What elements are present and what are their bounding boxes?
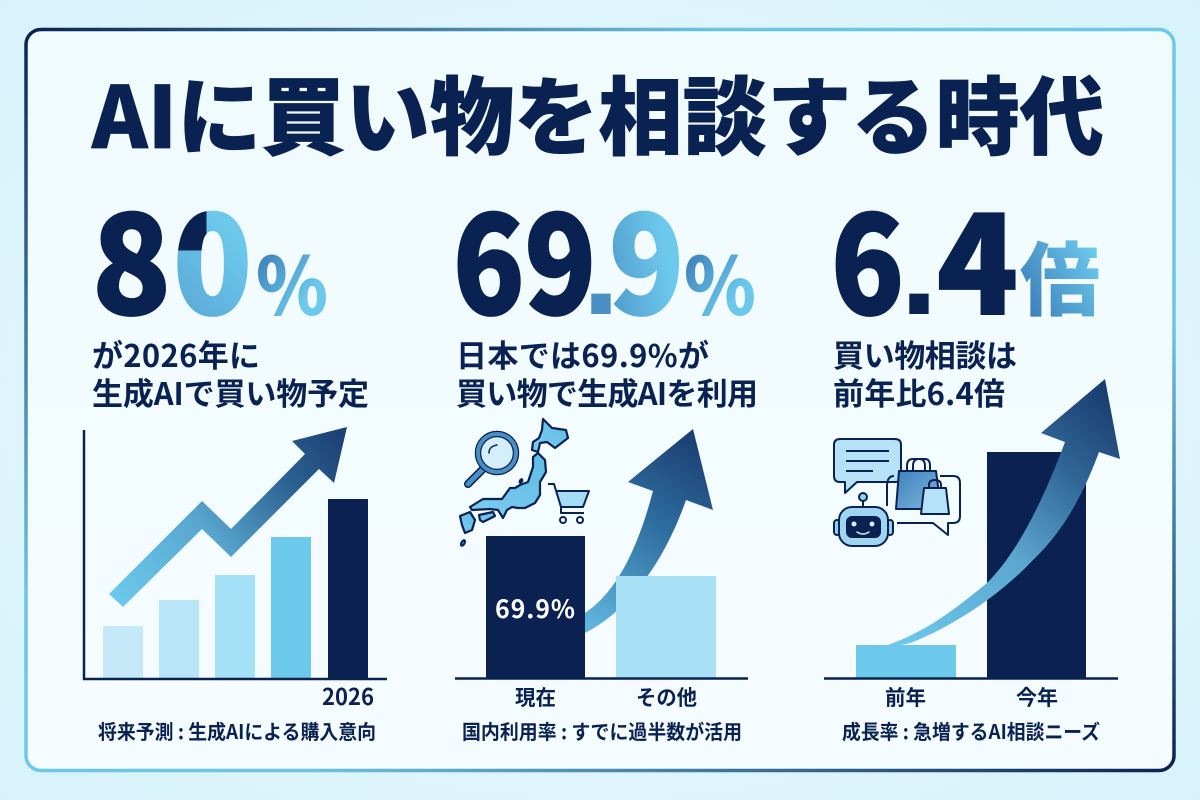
- axis label: previous year: 前年: [885, 682, 926, 712]
- panel: 69.9% Japan usage: [453, 157, 758, 745]
- big stat 6.4倍: [831, 157, 1100, 353]
- arrow: steep curved rise: [888, 379, 1120, 645]
- icon: chat bubble: [834, 439, 901, 493]
- caption: growth rate: 成長率 : 急増するAI相談ニーズ: [842, 716, 1100, 745]
- heading: 80% description: [92, 331, 369, 414]
- arrow: rising zigzag trend: [109, 427, 347, 607]
- axis label: this year: 今年: [1016, 682, 1058, 712]
- icon: shopping bags: [896, 459, 949, 514]
- icon: shopping cart: [548, 484, 589, 523]
- heading: Japan usage description: 日本では69.9%が: [456, 331, 709, 376]
- panel: 80% forecast: [84, 157, 387, 745]
- big stat 80%: 8: [92, 157, 171, 353]
- axis label 2026: 2026: [322, 678, 374, 712]
- big stat 6.4倍: 倍: [1020, 217, 1100, 333]
- heading: growth description: 前年比6.4倍: [833, 369, 1005, 414]
- icon: magnifying glass: [468, 434, 516, 484]
- heading: 80% description: が2026年に: [92, 331, 260, 376]
- caption: forecast: 将来予測 : 生成AIによる購入意向: [98, 716, 376, 745]
- heading: growth description: 買い物相談は: [833, 331, 1017, 376]
- heading: growth description: [833, 331, 1017, 414]
- heading: Japan usage description: 買い物で生成AIを利用: [456, 369, 758, 414]
- bar chart: previous vs this year: [824, 452, 1118, 678]
- axis label: current: 現在: [515, 682, 556, 712]
- icon: map of Japan: [460, 419, 568, 546]
- bar chart: current vs other: [455, 536, 748, 678]
- big stat 80%: 0: [173, 157, 252, 353]
- big stat 69.9%: 69: [453, 157, 596, 353]
- bar value label: 69.9%: [495, 590, 575, 626]
- axis label: other: その他: [636, 682, 697, 712]
- big stat 6.4倍: .: [900, 191, 938, 344]
- icon: outline chat bubble: [887, 476, 960, 535]
- arrow: curved rise: [585, 429, 713, 633]
- big stat 69.9%: %: [684, 223, 756, 339]
- heading: 80% description: 生成AIで買い物予定: [92, 369, 369, 414]
- big stat 69.9%: .: [582, 191, 620, 344]
- title: AIに買い物を相談する時代: [91, 50, 1104, 173]
- big stat 69.9%: [453, 157, 756, 353]
- panel: 6.4x growth: [824, 157, 1120, 745]
- big stat 6.4倍: 4: [937, 157, 1018, 353]
- icon: robot: [834, 493, 893, 546]
- big stat 6.4倍: 6: [831, 157, 904, 353]
- big stat 80%: %: [256, 223, 328, 339]
- heading: Japan usage description: [456, 331, 758, 414]
- caption: domestic usage: 国内利用率 : すでに過半数が活用: [462, 716, 742, 745]
- bar chart: purchase intent: [84, 430, 387, 679]
- big stat 69.9%: 9: [609, 157, 684, 353]
- big stat 80%: [92, 157, 328, 353]
